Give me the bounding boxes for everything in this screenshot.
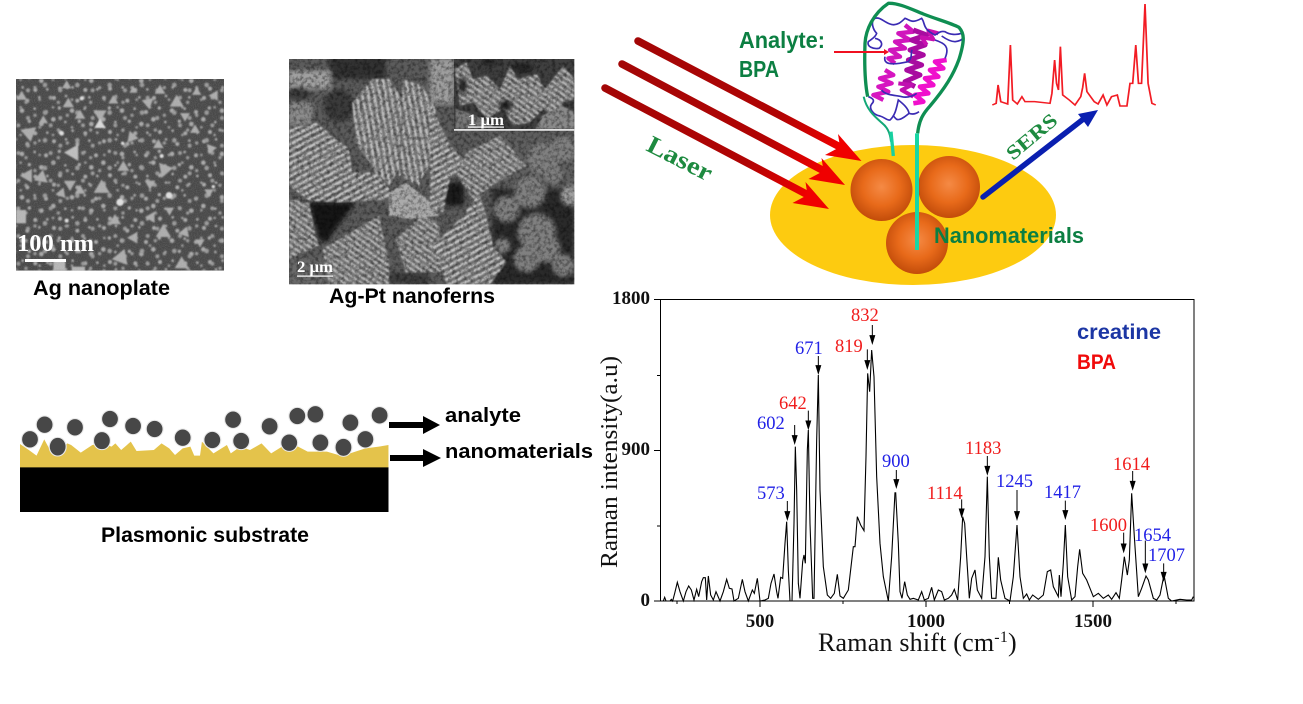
peak 1245: 1245 xyxy=(996,472,1033,492)
y axis title: Raman intensity(a.u) xyxy=(597,356,623,568)
peak arrows, left half xyxy=(785,325,899,519)
blobs xyxy=(493,136,581,277)
spectrum trace, low-shift part xyxy=(661,350,895,601)
SEM image: Ag-Pt nanoferns xyxy=(286,56,581,284)
peak labels xyxy=(757,306,1185,566)
substrate ellipse xyxy=(770,145,1056,285)
peak 1707: 1707 xyxy=(1148,546,1185,566)
inset border line xyxy=(454,129,575,131)
label: Plasmonic substrate: Plasmonic substrate xyxy=(101,523,309,547)
x axis title: -1 xyxy=(994,629,1008,646)
legend xyxy=(1077,320,1161,374)
label: nanomaterials: nanomaterials xyxy=(445,440,593,463)
peak 832: 832 xyxy=(851,306,879,326)
axis ticks xyxy=(654,300,1176,607)
x tick labels: 1000 xyxy=(907,611,945,632)
x tick labels: 1500 xyxy=(1074,611,1112,632)
legend: BPA: BPA xyxy=(1077,350,1116,374)
chart: Raman spectrum xyxy=(597,288,1194,657)
magenta helices xyxy=(873,25,947,103)
blue protein coil xyxy=(868,18,963,120)
x tick labels xyxy=(746,611,1112,632)
scale bar: 1 μm xyxy=(468,126,504,128)
black base layer xyxy=(20,467,388,512)
left ribbon tail xyxy=(891,132,893,156)
x axis title: Raman shift (cm xyxy=(818,628,994,657)
peak 900: 900 xyxy=(882,452,910,472)
SEM image: Ag nanoplate xyxy=(16,79,224,271)
y tick labels: 900 xyxy=(622,439,650,460)
panel: Ag nanoplate micrograph xyxy=(16,79,224,271)
arrow to analyte xyxy=(389,416,440,434)
label: Ag nanoplate: Ag nanoplate xyxy=(33,276,170,300)
peak 1183: 1183 xyxy=(965,439,1001,459)
peak 1600: 1600 xyxy=(1090,516,1127,536)
SERS arrow xyxy=(983,110,1098,197)
scale bar: 2 μm xyxy=(297,276,333,277)
peak 642: 642 xyxy=(779,394,807,414)
dark and mid background masses xyxy=(286,56,574,284)
peak 602: 602 xyxy=(757,414,785,434)
legend: creatine: creatine xyxy=(1077,320,1161,344)
peak 1654: 1654 xyxy=(1134,526,1171,546)
pointer line xyxy=(834,49,889,55)
panel: SERS schematic xyxy=(605,3,1156,285)
left ribbon xyxy=(864,97,891,142)
gold layer and analyte particles xyxy=(20,406,388,467)
label: analyte: analyte xyxy=(445,404,521,427)
y tick labels: 0 xyxy=(640,590,650,611)
x axis title: ) xyxy=(1008,628,1017,657)
peak 1614: 1614 xyxy=(1113,455,1150,475)
peak 1417: 1417 xyxy=(1044,483,1081,503)
x tick labels: 500 xyxy=(746,611,774,632)
label: SERS: SERS xyxy=(1002,109,1062,165)
arrow to nanomaterials xyxy=(390,449,441,467)
scale bar xyxy=(25,259,66,262)
panel: Ag-Pt nanofern micrograph xyxy=(286,56,581,284)
peak arrows, right half xyxy=(959,456,1166,580)
peak 573: 573 xyxy=(757,484,785,504)
inset scale text: 1 μm: 1 μm xyxy=(468,112,505,129)
peak 1114: 1114 xyxy=(927,484,963,504)
nanoparticle spheres xyxy=(850,156,980,274)
scale text: 2 μm: 2 μm xyxy=(297,259,334,276)
panel: plasmonic substrate diagram xyxy=(20,404,593,547)
label: Laser: Laser xyxy=(642,131,717,187)
plot frame xyxy=(660,300,1194,601)
peak 819: 819 xyxy=(835,337,863,357)
peak 671: 671 xyxy=(795,339,823,359)
fern leaves xyxy=(289,79,527,284)
stem xyxy=(911,133,923,250)
label: BPA: BPA xyxy=(739,56,779,82)
spectrum trace, high-shift part xyxy=(896,477,1193,601)
inset image xyxy=(454,59,574,130)
label: Ag-Pt nanoferns: Ag-Pt nanoferns xyxy=(329,284,495,308)
aptamer and protein xyxy=(864,3,963,250)
y tick labels xyxy=(612,288,650,611)
label: Nanomaterials: Nanomaterials xyxy=(934,223,1084,248)
y tick labels: 1800 xyxy=(612,288,650,309)
red SERS spectrum xyxy=(992,4,1156,106)
green aptamer outline xyxy=(865,3,963,133)
scale text: 100 nm: 100 nm xyxy=(17,231,94,257)
laser arrows xyxy=(605,41,862,209)
label: Analyte: Analyte: xyxy=(739,27,825,53)
